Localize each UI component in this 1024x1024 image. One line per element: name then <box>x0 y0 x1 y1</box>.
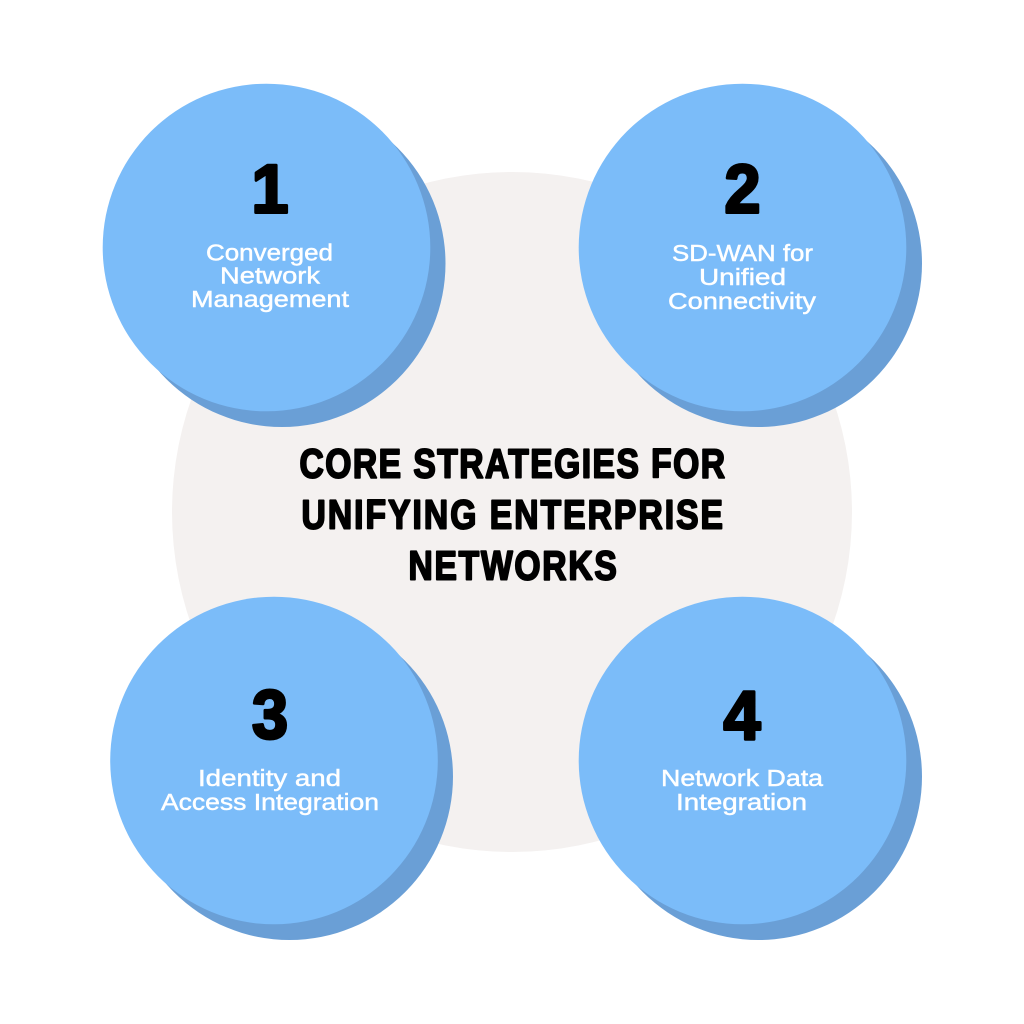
number 4: 4 <box>724 677 760 754</box>
label: Identity and Access Integration: Access Integration <box>161 789 379 815</box>
number 1: 1 <box>252 150 288 228</box>
label: SD-WAN for Unified Connectivity <box>668 240 817 314</box>
central background circle <box>172 172 852 852</box>
title <box>300 440 725 588</box>
title: NETWORKS <box>408 542 617 588</box>
title: CORE STRATEGIES FOR <box>300 440 725 486</box>
number 3: 3 <box>252 676 288 753</box>
panel: strategy 1 <box>103 84 445 427</box>
label: Identity and Access Integration <box>161 765 379 815</box>
label: SD-WAN for Unified Connectivity: SD-WAN for <box>672 240 813 266</box>
label: Network Data Integration: Integration <box>676 789 807 815</box>
panel: strategy 2 <box>579 84 922 427</box>
label: Converged Network Management <box>191 240 350 312</box>
label: Converged Network Management: Converged <box>206 240 333 266</box>
panel: strategy 3 <box>110 597 453 940</box>
label: Identity and Access Integration: Identity and <box>198 765 341 791</box>
label: SD-WAN for Unified Connectivity: Connectivity <box>668 288 817 314</box>
label: SD-WAN for Unified Connectivity: Unified <box>699 264 786 290</box>
label: Converged Network Management: Management <box>191 286 350 312</box>
title: UNIFYING ENTERPRISE <box>302 491 723 537</box>
label: Converged Network Management: Network <box>220 262 321 288</box>
number 2: 2 <box>724 150 760 228</box>
label: Network Data Integration <box>661 765 823 815</box>
label: Network Data Integration: Network Data <box>661 765 823 791</box>
panel: strategy 4 <box>579 597 922 940</box>
